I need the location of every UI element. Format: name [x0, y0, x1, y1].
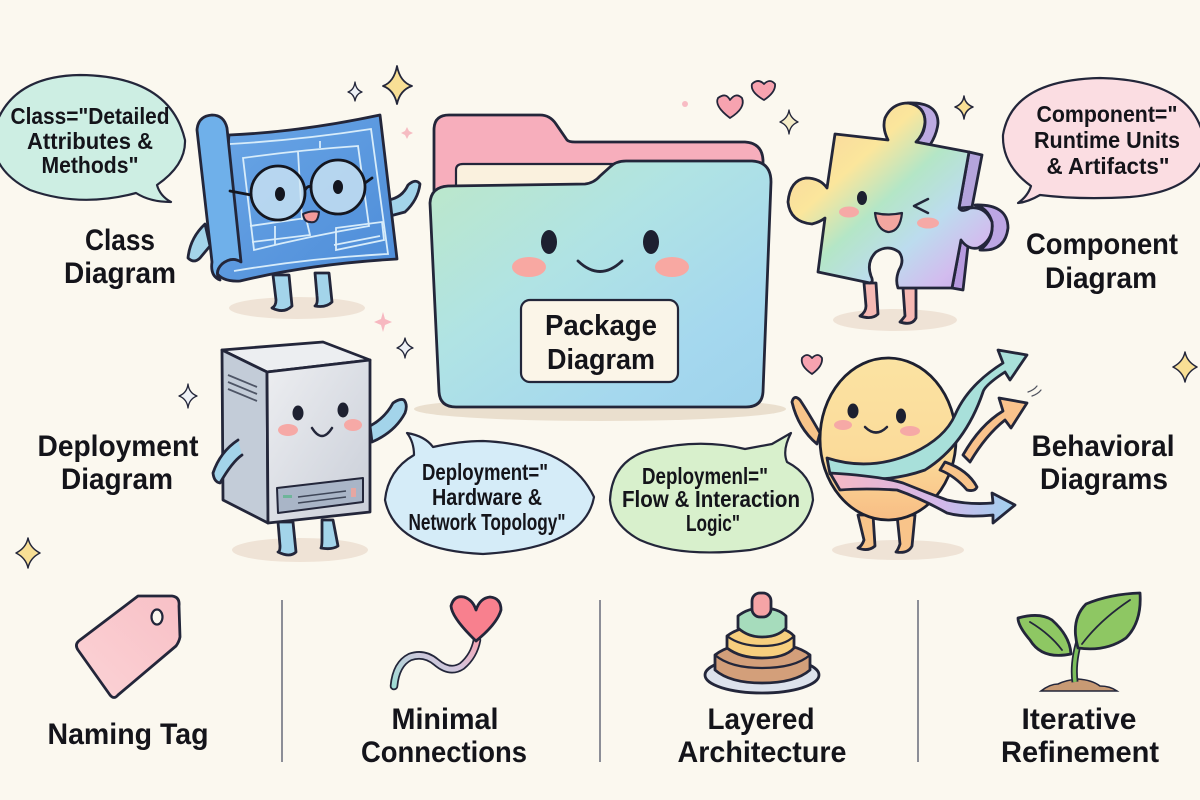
heading: deployment diagram	[38, 430, 199, 496]
decorative sparkles and hearts	[16, 66, 1197, 568]
label: package diagram: Diagram	[547, 344, 655, 376]
character: server	[213, 342, 406, 562]
character: puzzle piece	[788, 103, 1008, 331]
label: minimal connections: Minimal	[392, 703, 498, 736]
heading: component diagram: Diagram	[1045, 262, 1157, 295]
face	[512, 230, 689, 277]
panel: behavioral diagrams	[610, 350, 1174, 560]
icon: tag	[76, 596, 180, 698]
arrow: teal	[827, 350, 1027, 479]
folder front	[430, 161, 771, 407]
heading: deployment diagram: Deployment	[38, 430, 199, 463]
heading: class diagram: Diagram	[64, 257, 176, 290]
heading: component diagram	[1026, 228, 1178, 295]
bottom strip dividers	[282, 600, 918, 762]
heading: component diagram: Component	[1026, 228, 1178, 261]
label: iterative refinement	[1001, 703, 1159, 769]
speech bubble: component: & Artifacts"	[1046, 153, 1170, 179]
speech bubble: component	[1003, 78, 1200, 203]
heading: class diagram: Class	[85, 224, 155, 257]
panel: minimal connections	[361, 597, 527, 769]
speech bubble: class	[0, 75, 185, 202]
panel: iterative refinement	[1001, 593, 1159, 769]
label: package diagram	[521, 300, 678, 382]
label: iterative refinement: Iterative	[1022, 703, 1136, 736]
speech bubble: component: Component="	[1036, 101, 1178, 127]
speech bubble: deployment	[385, 433, 594, 554]
speech bubble: deployment: Network Topology"	[408, 509, 566, 535]
label: naming tag: Naming Tag	[48, 718, 208, 751]
label: minimal connections	[361, 703, 527, 769]
speech bubble: deployment: Deployment="	[422, 459, 548, 485]
speech bubble: behavioral: Flow & Interaction	[622, 486, 800, 512]
paper	[456, 164, 640, 200]
speech bubble: behavioral: Logic"	[686, 510, 740, 536]
heading: behavioral diagrams	[1032, 430, 1174, 496]
puzzle side: lower band	[952, 240, 968, 290]
speech bubble: class: Class="Detailed	[10, 103, 170, 129]
icon: sprout	[1018, 593, 1140, 691]
label: layered architecture: Layered	[708, 703, 814, 736]
label: iterative refinement: Refinement	[1001, 736, 1159, 769]
character: flow ball	[792, 350, 1041, 560]
puzzle side: right knob	[975, 205, 1008, 250]
speech bubble: component: Runtime Units	[1034, 127, 1180, 153]
label: layered architecture	[678, 703, 846, 769]
label: package diagram: Package	[545, 310, 657, 342]
panel: naming tag	[48, 596, 208, 751]
puzzle side: top knob	[908, 103, 938, 145]
speech bubble: deployment: Hardware &	[432, 484, 542, 510]
heading: behavioral diagrams: Diagrams	[1040, 463, 1168, 496]
icon: layer stack	[705, 593, 819, 693]
panel: class diagram	[0, 75, 420, 319]
ground shadow	[414, 397, 786, 421]
panel: layered architecture	[678, 593, 846, 769]
icon: heart on a wire	[394, 597, 501, 686]
heading: deployment diagram: Diagram	[61, 463, 173, 496]
arrow: orange	[963, 398, 1027, 462]
speech bubble: behavioral: Deploymenl="	[642, 463, 768, 489]
panel: deployment diagram	[38, 342, 594, 562]
arrow: pink to purple	[830, 473, 1015, 523]
label: layered architecture: Architecture	[678, 736, 846, 769]
panel: component diagram	[788, 78, 1200, 331]
puzzle side: right band	[959, 152, 982, 208]
label: minimal connections: Connections	[361, 736, 527, 769]
character: blueprint	[188, 115, 420, 319]
speech bubble: class: Methods"	[42, 152, 138, 178]
puzzle front	[788, 103, 992, 288]
motion marks	[1028, 386, 1041, 396]
speech bubble: class: Attributes &	[27, 128, 153, 154]
panel: central package folder	[414, 115, 786, 421]
folder back tab	[434, 115, 763, 200]
heading: class diagram	[64, 224, 176, 290]
speech bubble: behavioral	[610, 433, 813, 552]
heading: behavioral diagrams: Behavioral	[1032, 430, 1174, 463]
